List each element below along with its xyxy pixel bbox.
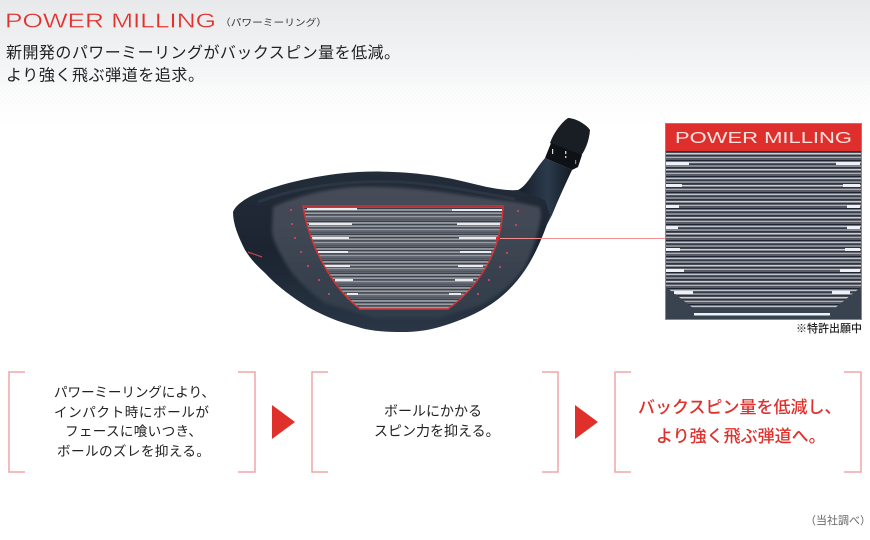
patent note: ※特許出願中 [796,321,862,335]
step 1 bracket and text: ボールのズレを抑える。 [57,444,210,459]
title: POWER MILLING [5,10,216,32]
intro text: より強く飛ぶ弾道を追求。 [6,66,204,84]
title [5,10,327,32]
step 3 bracket and text: バックスピン量を低減し、 [638,398,842,417]
step 1 bracket and text: パワーミーリングにより、 [54,385,215,400]
arrow 2 [575,405,598,439]
hosel cap [550,118,590,156]
title: （パワーミーリング） [220,17,327,29]
panel: power milling close-up [665,123,862,320]
milling area outline [303,206,503,309]
intro text [6,44,400,84]
inset milled lines [666,151,861,316]
illustration: driver head [233,118,590,332]
intro text: 新開発のパワーミーリングがバックスピン量を低減。 [6,44,400,62]
hosel adjustment ring [545,143,582,170]
score line dots [290,209,519,295]
step 3 bracket and text [615,372,861,472]
page background gradient [0,0,870,140]
step 1 bracket and text: インパクト時にボールが [54,405,209,420]
inset header [665,123,862,151]
source note: （当社調べ） [805,513,870,527]
crown highlight [258,182,515,202]
club head body [233,172,550,332]
step 3 bracket and text: より強く飛ぶ弾道へ。 [656,427,826,446]
step 2 bracket and text: スピン力を抑える。 [374,423,500,439]
face plate [272,187,541,318]
arrow 1 [272,405,295,439]
step 2 bracket and text [312,372,558,472]
power milling grooves [300,204,506,312]
step 1 bracket and text: フェースに喰いつき、 [65,424,202,439]
step 2 bracket and text: ボールにかかる [384,403,482,419]
callout connector line [496,236,665,240]
step 1 bracket and text [9,372,255,472]
inset header: POWER MILLING [675,130,852,147]
hosel [518,158,572,232]
red toe accent [248,252,262,257]
